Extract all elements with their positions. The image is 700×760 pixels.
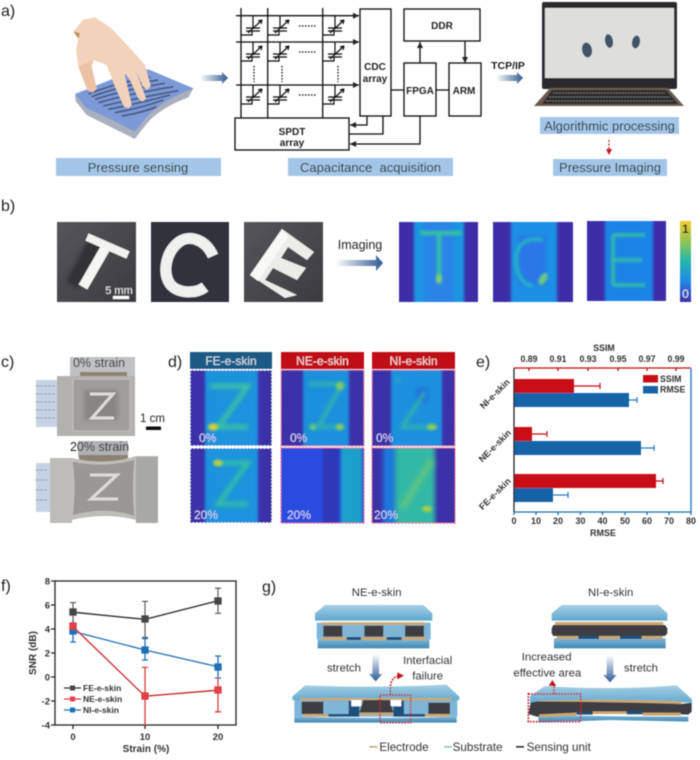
category labels: NE-e-skin <box>477 428 513 464</box>
NE structure before stretch <box>315 605 432 648</box>
label: imaging arrow: Imaging <box>338 238 382 252</box>
label: pressure imaging: Pressure Imaging <box>559 160 661 175</box>
heatmap: FE 20%: 20% <box>194 508 218 522</box>
axis labels: 2 <box>45 648 50 660</box>
heading: NE-e-skin: NE-e-skin <box>352 587 402 599</box>
axis labels: 0 <box>45 672 50 684</box>
text: 0% strain: 0% strain <box>73 356 125 370</box>
axis labels: 8 <box>45 576 50 588</box>
sensor sheet with hand <box>73 17 193 139</box>
bottom axis labels: 50 <box>620 516 630 526</box>
NE structure after stretch <box>292 685 459 723</box>
legend <box>369 741 592 754</box>
heatmap: NE 0% <box>280 369 365 447</box>
legend: RMSE <box>660 384 686 394</box>
colorbar: 0 <box>682 287 689 301</box>
callout: interfacial failure: Interfacial <box>403 655 452 667</box>
label e: e) <box>476 354 490 371</box>
panel g: structure schematic <box>262 579 692 754</box>
axis labels: 6 <box>45 600 50 612</box>
NI structure before stretch <box>552 605 667 648</box>
laptop <box>534 2 684 106</box>
circuit diagram <box>235 8 481 150</box>
panel b: letter imaging <box>1 198 691 312</box>
arrow: NE stretch <box>327 654 382 681</box>
label: pressure sensing: Pressure sensing <box>88 160 188 175</box>
circuit labels: FPGA <box>406 86 434 97</box>
callout: interfacial failure <box>380 655 452 723</box>
top axis labels: 0.99 <box>667 354 685 364</box>
top axis labels: 0.91 <box>549 354 567 364</box>
axis labels: 10 <box>140 732 150 743</box>
photo: E <box>244 222 323 302</box>
panel a: pressure imaging workflow <box>1 2 684 176</box>
arrow: processing to imaging <box>608 140 610 154</box>
header: NI-e-skin <box>372 352 455 369</box>
legend: Sensing unit <box>527 741 592 754</box>
category labels <box>477 377 513 512</box>
NI structure after stretch <box>528 685 692 723</box>
heatmap: C <box>492 221 574 303</box>
bottom axis labels <box>511 516 696 538</box>
circuit labels: CDC <box>364 62 386 73</box>
top axis labels: 0.95 <box>609 354 627 364</box>
circuit labels: array <box>280 138 305 149</box>
axis labels: -4 <box>42 720 51 732</box>
arrow: sensing to acquisition <box>200 72 228 84</box>
axis labels: 0 <box>70 732 76 743</box>
sample: 0% strain <box>36 356 135 436</box>
heatmap: NE 0%: 0% <box>290 431 308 445</box>
series: NE-e-skin <box>70 623 221 725</box>
label: imaging arrow <box>335 238 383 271</box>
axis labels <box>28 576 223 755</box>
hand <box>73 17 151 108</box>
axis labels: SNR (dB) <box>28 631 39 675</box>
sample: 20% strain <box>36 440 158 523</box>
series: FE-e-skin <box>70 588 221 637</box>
legend: Substrate <box>453 741 503 754</box>
header: FE-e-skin <box>190 352 272 369</box>
heatmap: NI 20% <box>371 447 456 524</box>
top axis labels: SSIM <box>593 343 615 353</box>
bars <box>514 379 663 502</box>
heatmap: NI 0% <box>371 369 456 447</box>
circuit labels: DDR <box>431 21 454 32</box>
heatmap: NI 0%: 0% <box>376 431 394 445</box>
heatmap: NE 20% <box>280 447 365 524</box>
text: 20% strain: 20% strain <box>70 440 129 454</box>
photo: C <box>151 222 229 302</box>
legend <box>64 683 122 715</box>
legend: NE-e-skin <box>83 694 122 704</box>
heatmap: NI 20%: 20% <box>374 508 398 522</box>
header: NE-e-skin <box>281 352 364 369</box>
category labels: FE-e-skin <box>477 476 513 512</box>
bottom axis labels: 80 <box>686 516 696 526</box>
TCP/IP label and arrow <box>491 60 525 84</box>
circuit labels <box>279 21 475 149</box>
photo: T: 5 mm <box>105 285 133 297</box>
heatmap: FE 20% <box>190 447 272 524</box>
bottom axis labels: 70 <box>664 516 674 526</box>
circuit labels: SPDT <box>279 127 305 138</box>
legend: NI-e-skin <box>83 705 119 715</box>
axes <box>514 368 691 515</box>
heatmap: FE 0%: 0% <box>199 431 217 445</box>
panel c: strain photos <box>1 354 165 523</box>
axis labels: -2 <box>42 696 50 708</box>
bottom axis labels: 10 <box>531 516 541 526</box>
heatmap: E <box>586 220 667 302</box>
top axis labels <box>520 343 685 364</box>
callout: increased effective area <box>513 652 582 722</box>
arrow: NI stretch <box>603 655 658 682</box>
label: pressure sensing <box>56 158 221 176</box>
legend: FE-e-skin <box>83 683 121 693</box>
callout: interfacial failure: failure <box>412 670 443 682</box>
arrow: NI stretch: stretch <box>624 662 658 674</box>
colorbar: 1 <box>682 222 689 236</box>
heading: NI-e-skin: NI-e-skin <box>588 587 633 599</box>
header: FE-e-skin: FE-e-skin <box>205 354 257 368</box>
TCP/IP label and arrow: TCP/IP <box>491 60 525 72</box>
axes <box>51 581 236 729</box>
heatmap: T <box>398 221 479 303</box>
circuit labels: ARM <box>453 86 475 97</box>
bottom axis labels: 0 <box>511 516 517 526</box>
category labels: NI-e-skin <box>478 377 512 411</box>
dashed frames <box>190 370 455 523</box>
axis labels: Strain (%) <box>123 744 169 755</box>
photo: T <box>57 222 136 302</box>
heatmap: FE 0% <box>190 369 272 447</box>
legend <box>643 374 686 394</box>
label g: g) <box>262 579 276 596</box>
label: capacitance acquisition: Capacitance acquisition <box>300 160 441 175</box>
axis labels: 4 <box>45 624 51 636</box>
top axis labels: 0.93 <box>579 354 597 364</box>
label f: f) <box>1 578 11 595</box>
label b: b) <box>1 198 15 215</box>
top axis labels: 0.97 <box>638 354 656 364</box>
axis labels: 20 <box>213 732 223 743</box>
heatmap: NE 20%: 20% <box>287 508 311 522</box>
bottom axis labels: 20 <box>553 516 563 526</box>
legend: SSIM <box>660 374 682 384</box>
series: NI-e-skin <box>70 621 221 678</box>
header: NE-e-skin: NE-e-skin <box>296 354 349 368</box>
panel f: SNR line chart <box>1 576 236 755</box>
bottom axis labels: 40 <box>597 516 608 526</box>
panel e: bar chart SSIM and RMSE <box>476 343 696 538</box>
bottom axis labels: 30 <box>575 516 586 526</box>
top axis labels: 0.89 <box>520 354 538 364</box>
callout: increased effective area: effective area <box>513 667 582 679</box>
callout: increased effective area: Increased <box>522 652 572 664</box>
circuit labels: array <box>363 74 388 85</box>
panel d: strain heatmaps <box>168 352 455 535</box>
colorbar <box>680 221 691 302</box>
label d: d) <box>168 354 182 371</box>
label a: a) <box>1 3 15 20</box>
bottom axis labels: 60 <box>642 516 652 526</box>
label: algorithmic processing: Algorithmic processing <box>544 118 675 134</box>
arrow: NE stretch: stretch <box>327 662 361 674</box>
header: NI-e-skin: NI-e-skin <box>389 354 438 368</box>
bottom axis labels: RMSE <box>590 528 616 538</box>
scale bar: 1 cm: 1 cm <box>140 413 165 425</box>
legend: Electrode <box>379 741 429 754</box>
label c: c) <box>1 354 14 371</box>
